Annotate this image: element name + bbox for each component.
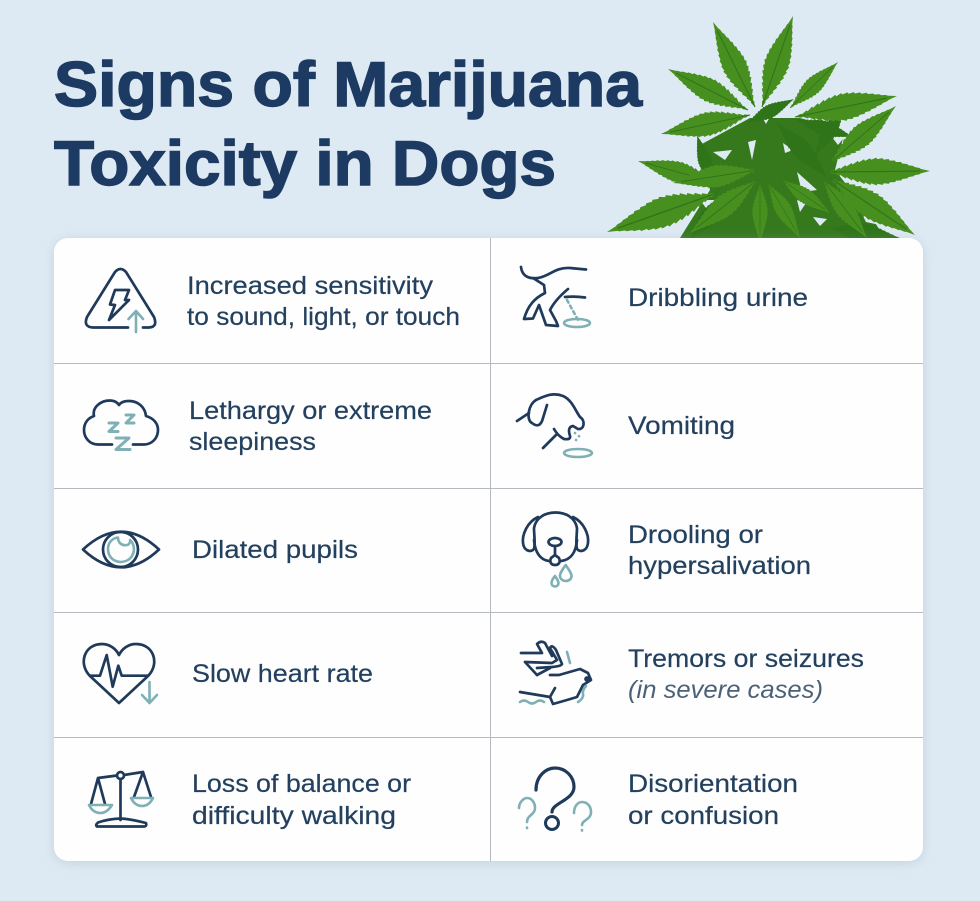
- text: drooling: Drooling or: [628, 521, 763, 549]
- row: disorientation: [519, 768, 798, 830]
- text: tremors: [628, 645, 864, 704]
- row: slow heart rate: [84, 644, 373, 703]
- text: lethargy: Lethargy or extreme: [189, 397, 432, 425]
- text: loss of balance: Loss of balance or: [192, 770, 411, 798]
- row: dilated pupils: [83, 532, 358, 567]
- text: vomiting: Vomiting: [628, 412, 735, 440]
- title: Signs of Marijuana: [54, 50, 643, 120]
- row: lethargy: [84, 397, 432, 456]
- text: lethargy: sleepiness: [189, 428, 316, 456]
- icon: question marks: [519, 768, 591, 830]
- icon: dog urinating: [521, 267, 590, 327]
- title: [54, 50, 643, 199]
- text: tremors: Tremors or seizures: [628, 645, 864, 673]
- row: loss of balance: [89, 770, 411, 830]
- icon: dog vomiting: [517, 394, 592, 457]
- row: drooling: [523, 512, 811, 586]
- text: loss of balance: difficulty walking: [192, 802, 396, 830]
- text: sensitivity: to sound, light, or touch: [187, 303, 460, 331]
- text: disorientation: Disorientation: [628, 770, 798, 798]
- icon: triangle warning with bolt: [86, 269, 155, 332]
- text: dilated pupils: Dilated pupils: [192, 536, 358, 564]
- row: dribbling urine: [521, 267, 808, 327]
- illustration: cannabis plant: [602, 12, 930, 247]
- text: disorientation: or confusion: [628, 802, 779, 830]
- panel: signs table: [54, 238, 923, 861]
- icon: dog having a seizure: [520, 642, 591, 704]
- icon: eye: [83, 532, 159, 567]
- icon: heart with pulse: [84, 644, 157, 703]
- row: tremors: [520, 642, 864, 704]
- text: slow heart rate: Slow heart rate: [192, 660, 373, 688]
- icon: dog face with drool: [523, 512, 588, 586]
- icon: balance scale: [89, 772, 153, 826]
- icon: cloud with z's: [84, 400, 158, 450]
- text: drooling: hypersalivation: [628, 552, 811, 580]
- row: vomiting: [517, 394, 735, 457]
- text: tremors: (in severe cases): [628, 676, 823, 704]
- title: Toxicity in Dogs: [54, 129, 556, 199]
- row: increased sensitivity: [86, 269, 460, 332]
- text: dribbling urine: Dribbling urine: [628, 284, 808, 312]
- text: sensitivity: Increased sensitivity: [187, 272, 434, 300]
